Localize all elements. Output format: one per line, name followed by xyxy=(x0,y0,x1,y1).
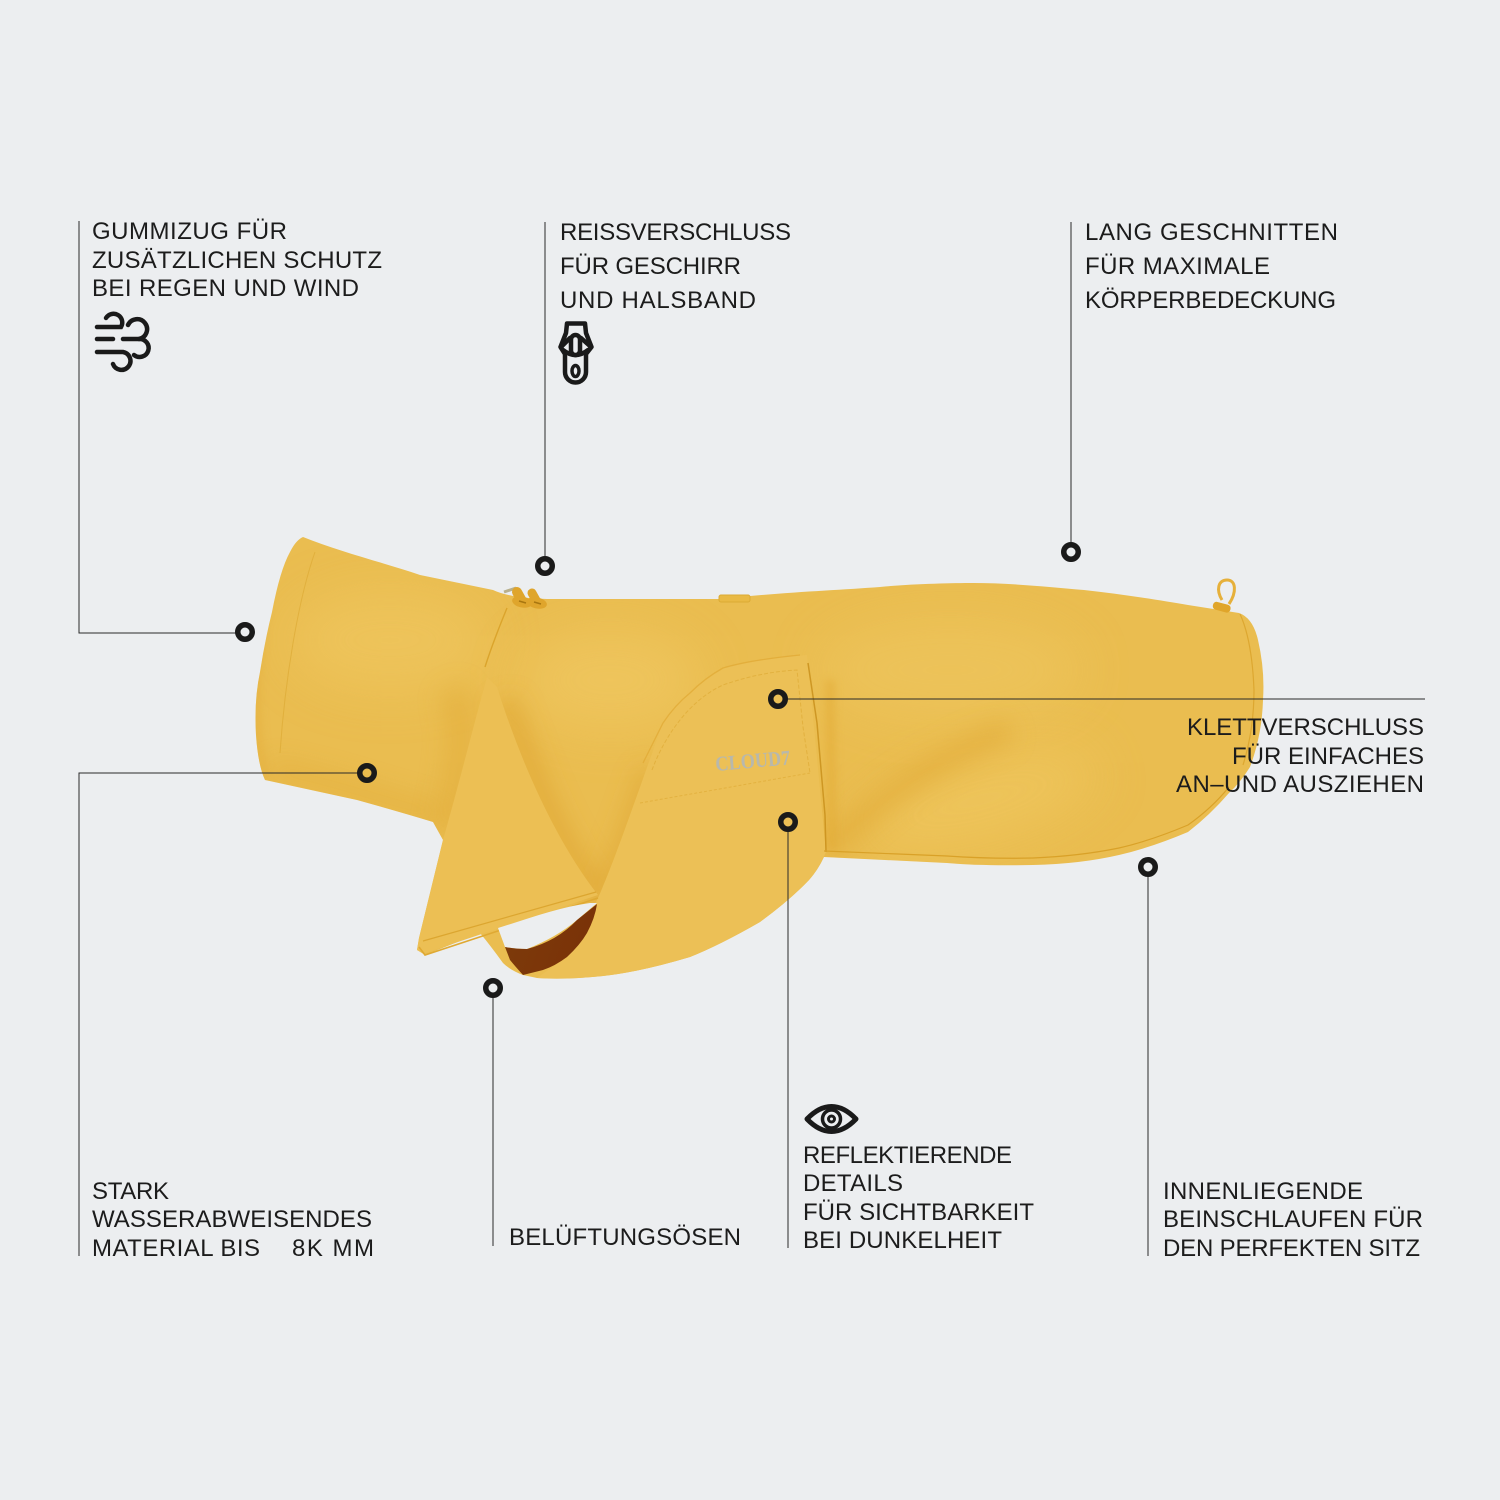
text block: LANG GESCHNITTEN xyxy=(1085,219,1338,246)
text block: BELÜFTUNGSÖSEN xyxy=(509,1224,741,1251)
leg opening xyxy=(498,903,597,949)
leader line xyxy=(544,222,546,557)
text block: KLETTVERSCHLUSS xyxy=(1187,714,1424,741)
marker dot xyxy=(538,559,552,573)
callout: beinschlaufen xyxy=(1141,860,1423,1262)
leg flap hem xyxy=(423,892,596,941)
text block: 8K MM xyxy=(292,1235,374,1262)
icon: zipper xyxy=(560,324,592,383)
text block: REFLEKTIERENDE xyxy=(803,1142,1012,1169)
yellow dog raincoat xyxy=(255,537,1263,979)
flap seams xyxy=(643,655,800,763)
marker dot xyxy=(1141,860,1155,874)
text block xyxy=(1163,1178,1423,1262)
text block: REISSVERSCHLUSS xyxy=(560,219,791,246)
callout: wasserabweisendes material xyxy=(79,766,374,1262)
marker dot xyxy=(486,981,500,995)
text block: INNENLIEGENDE xyxy=(1163,1178,1363,1205)
leader line xyxy=(79,221,236,633)
text block: STARK xyxy=(92,1178,169,1205)
reflective logo: CLOUD7 xyxy=(714,746,791,776)
text block xyxy=(1176,714,1424,798)
callout: klettverschluss xyxy=(771,692,1425,798)
text block xyxy=(560,219,791,314)
text block: FÜR SICHTBARKEIT xyxy=(803,1199,1034,1226)
text block: BEI REGEN UND WIND xyxy=(92,275,359,302)
text block: UND HALSBAND xyxy=(560,287,756,314)
text block: ZUSÄTZLICHEN SCHUTZ xyxy=(92,247,382,274)
text block: AN–UND AUSZIEHEN xyxy=(1176,771,1424,798)
text block xyxy=(803,1142,1034,1254)
belly strap flap xyxy=(537,655,826,979)
callout: reflektierende details xyxy=(781,815,1034,1254)
icon: eye xyxy=(807,1106,856,1132)
text block: WASSERABWEISENDES xyxy=(92,1206,372,1233)
neck seam and collar stitching xyxy=(485,608,507,667)
callout: lang geschnitten xyxy=(1064,219,1338,559)
icon: wind xyxy=(97,314,149,370)
leader line xyxy=(787,698,1425,700)
text block: DEN PERFEKTEN SITZ xyxy=(1163,1235,1420,1262)
leader line xyxy=(79,773,358,1256)
text block: GUMMIZUG FÜR xyxy=(92,218,287,245)
dark lining xyxy=(505,904,597,975)
drawcord loop xyxy=(1212,580,1234,613)
coat body xyxy=(256,537,1263,979)
text block xyxy=(92,218,382,302)
marker dot xyxy=(360,766,374,780)
text block: KÖRPERBEDECKUNG xyxy=(1085,287,1336,314)
text block: DETAILS xyxy=(803,1170,903,1197)
front leg flap xyxy=(417,677,598,953)
leader line xyxy=(492,997,494,1246)
leader line xyxy=(787,831,789,1248)
text block: FÜR EINFACHES xyxy=(1232,743,1424,770)
callout: gummizug xyxy=(79,218,382,639)
text block: BEINSCHLAUFEN FÜR xyxy=(1163,1206,1423,1233)
text block: BEI DUNKELHEIT xyxy=(803,1227,1002,1254)
text block xyxy=(92,1178,374,1262)
leader line xyxy=(1070,222,1072,543)
hem seam xyxy=(824,787,1229,858)
leader line xyxy=(1147,876,1149,1256)
zipper pulls xyxy=(504,588,548,610)
marker dot xyxy=(238,625,252,639)
text block: FÜR MAXIMALE xyxy=(1085,253,1270,280)
text block: FÜR GESCHIRR xyxy=(560,253,741,280)
marker dot xyxy=(771,692,785,706)
callout: belüftungsösen xyxy=(486,981,741,1251)
marker dot xyxy=(781,815,795,829)
text block xyxy=(1085,219,1338,314)
text block: MATERIAL BIS xyxy=(92,1235,260,1262)
callout: reissverschluss xyxy=(538,219,791,573)
top tab xyxy=(719,595,750,602)
marker dot xyxy=(1064,545,1078,559)
